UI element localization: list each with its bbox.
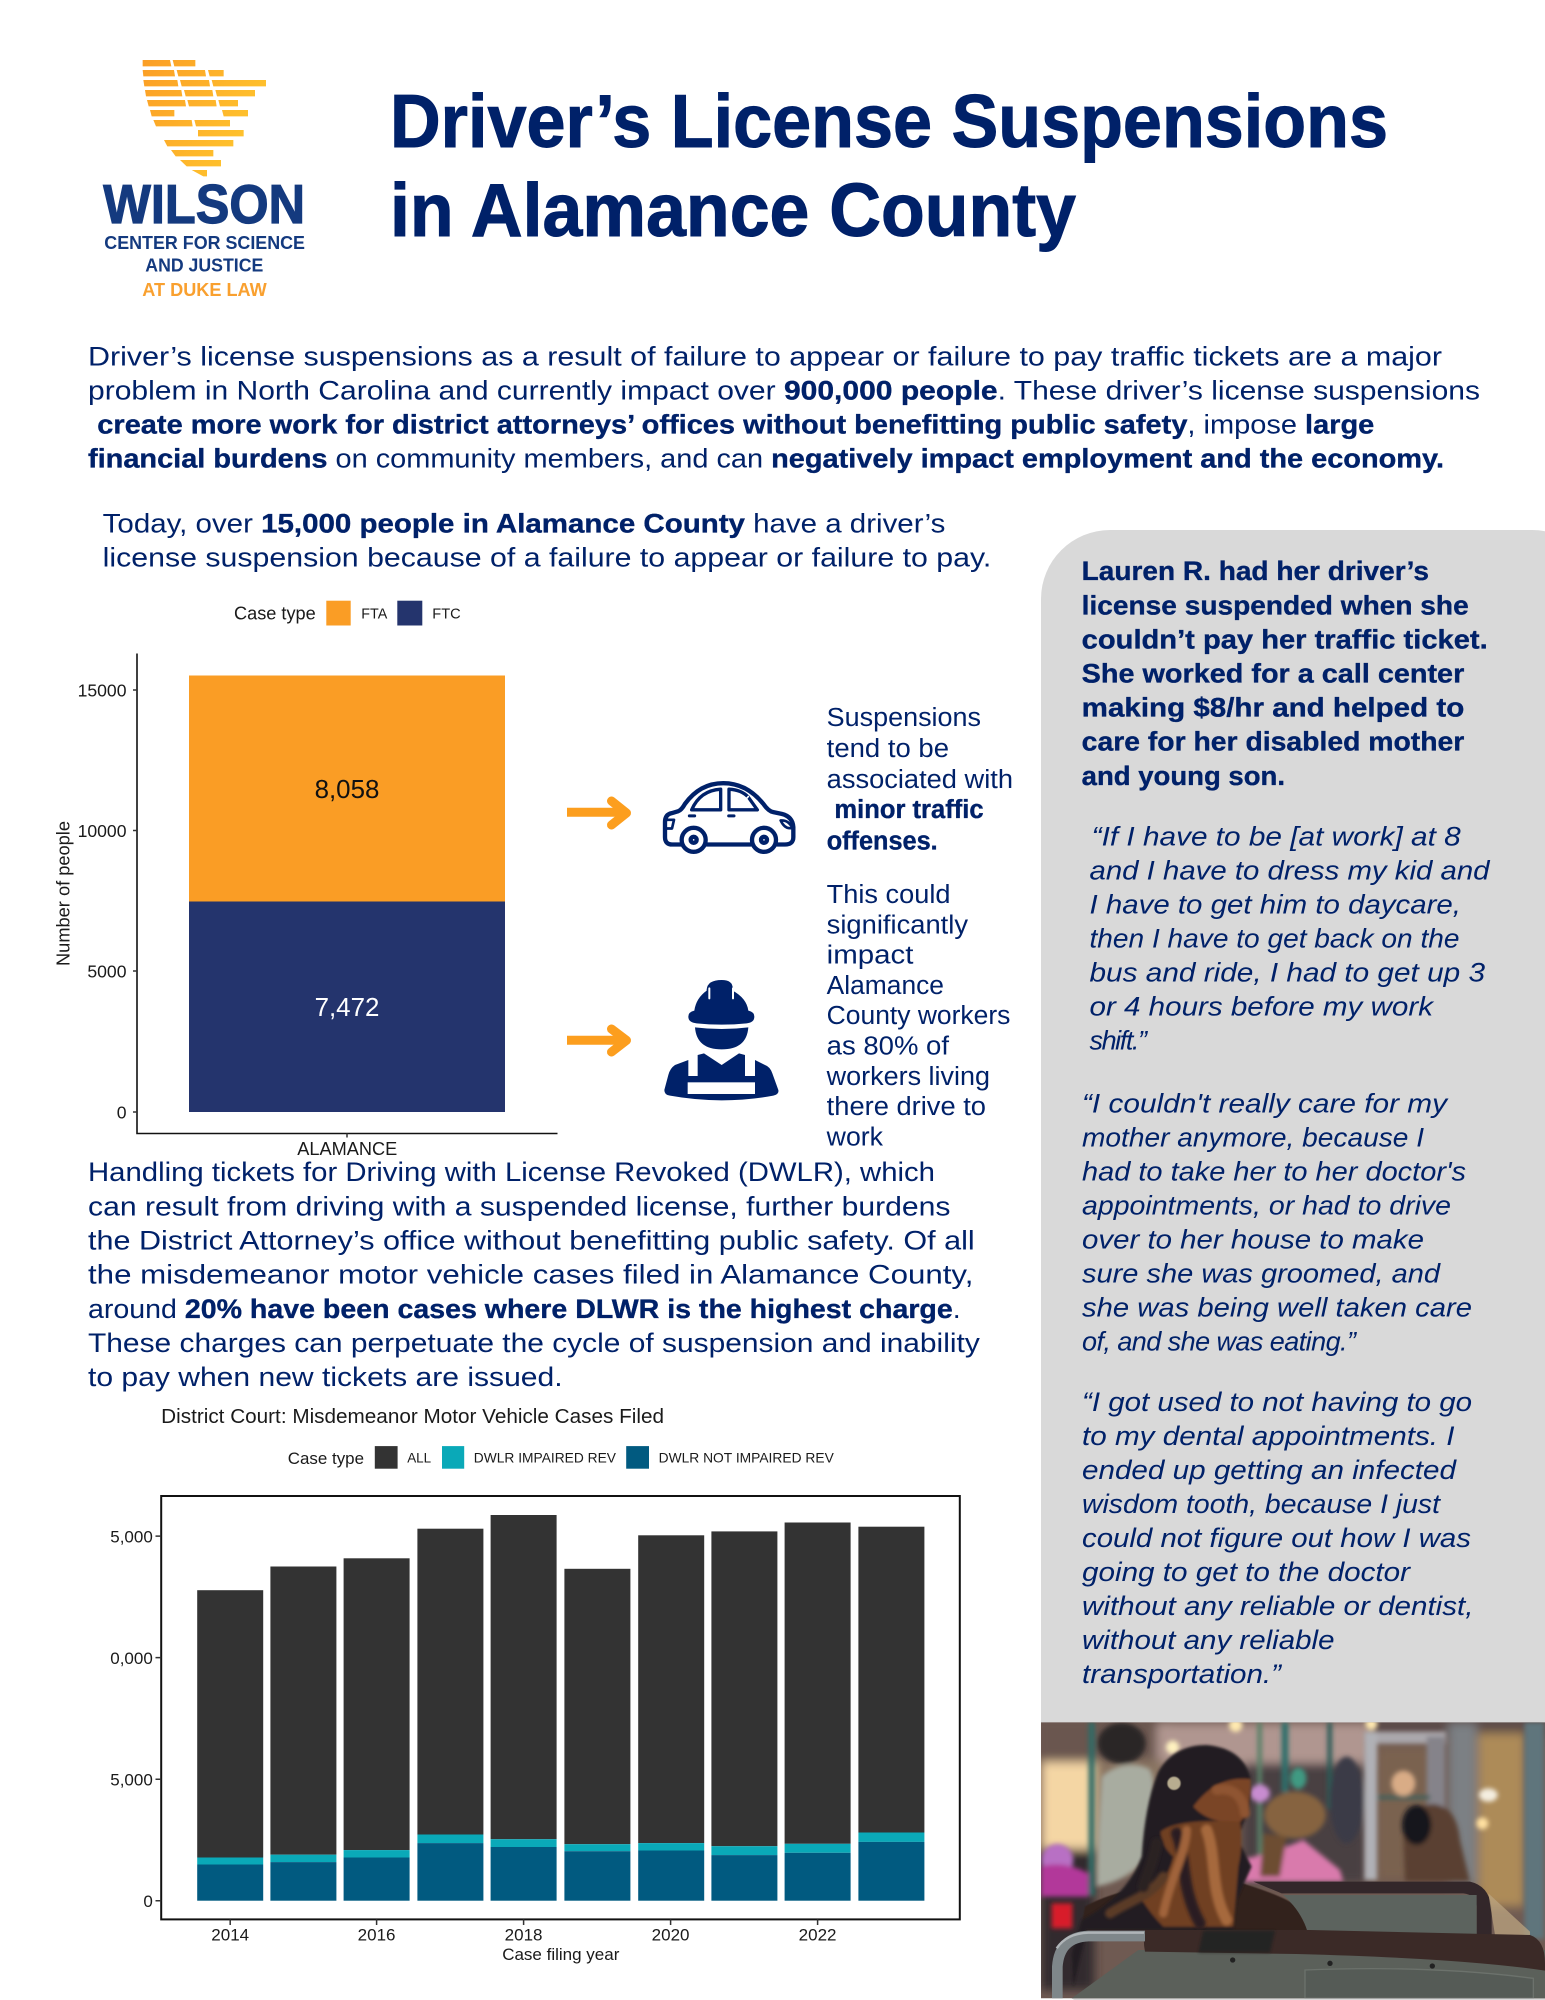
y axis (53, 654, 558, 1138)
text: minor traffic offenses: minor traffic (834, 796, 984, 824)
plot frame and axes: 2020 (652, 1926, 690, 1944)
quote: dental appointments: to my dental appointments. I (1082, 1421, 1455, 1451)
text: minor traffic offenses: Suspensions (827, 704, 981, 732)
bar: FTC segment: 7,472 (315, 994, 379, 1022)
y axis: 10000 (78, 821, 127, 841)
text: worker impact: work (826, 1123, 883, 1151)
arrow to worker (567, 1029, 626, 1052)
chart legend: FTC (432, 606, 461, 622)
panel heading: license suspended when she (1082, 590, 1469, 620)
DWLR paragraph: the misdemeanor motor vehicle cases filed in Alamance County, (88, 1259, 973, 1289)
quote: dental appointments: without any reliable (1082, 1625, 1334, 1655)
bars: ALL cases (197, 1515, 924, 1858)
quote: caring for mother: mother anymore, because I (1082, 1122, 1425, 1152)
quote: caring for mother: of, and she was eating.” (1082, 1326, 1357, 1356)
logo wordmark: AT DUKE LAW (142, 279, 267, 300)
plot frame and axes: 0,000 (110, 1649, 153, 1668)
text: minor traffic offenses: associated with (827, 766, 1013, 794)
panel background (1041, 530, 1545, 2000)
hair clip (1167, 1777, 1181, 1790)
quote: getting to work: “If I have to be [at work] at 8 (1092, 822, 1461, 852)
chart legend: DWLR IMPAIRED REV (474, 1450, 617, 1466)
plot frame and axes (110, 1496, 960, 1964)
panel heading: Lauren R. had her driver’s (1082, 556, 1429, 586)
icon: car (665, 783, 793, 852)
icon: construction worker (664, 980, 778, 1100)
logo: Wilson Center for Science and Justice at Duke Law (103, 60, 305, 300)
text: worker impact: workers living (826, 1063, 990, 1091)
plot frame and axes: 2014 (211, 1926, 249, 1944)
hair strands (1110, 1789, 1245, 1923)
window pole (1524, 1722, 1544, 1939)
rear seat (1253, 1882, 1492, 1935)
woman's hair (1072, 1745, 1252, 1987)
plot frame and axes: 5,000 (110, 1770, 153, 1789)
quote: dental appointments: transportation.” (1082, 1659, 1282, 1689)
quote: getting to work: then I have to get back on the (1090, 924, 1460, 954)
intro paragraph: financial burdens on community members, and can negatively impact employment and the economy. (88, 444, 1444, 474)
bars: DWLR impaired revocation (197, 1832, 924, 1864)
logo wordmark (103, 174, 305, 300)
title (390, 79, 1388, 252)
y axis: 5000 (87, 962, 127, 982)
quote: dental appointments: could not figure out how I was (1082, 1523, 1471, 1553)
panel heading: care for her disabled mother (1082, 727, 1465, 757)
quote: caring for mother: “I couldn't really care for my (1082, 1088, 1449, 1118)
plot frame and axes: 0 (143, 1892, 153, 1911)
chart legend (288, 1446, 834, 1469)
blurred bus interior (1037, 1717, 1545, 1990)
chart legend: FTA (361, 606, 387, 622)
intro paragraph: Driver’s license suspensions as a result of failure to appear or failure to pay traffic tickets are a major (88, 342, 1442, 372)
quote: getting to work: and I have to dress my kid and (1090, 856, 1491, 886)
chart legend: DWLR NOT IMPAIRED REV (659, 1450, 834, 1466)
plot frame and axes: 2018 (505, 1926, 543, 1944)
child in pink (1041, 1844, 1073, 1876)
girl with braid (1264, 1792, 1326, 1838)
intro paragraph: create more work for district attorneys’ offices without benefitting public safety , impose large (97, 410, 1374, 440)
DWLR paragraph: Handling tickets for Driving with License Revoked (DWLR), which (88, 1157, 935, 1187)
plot frame and axes: Case filing year (502, 1945, 620, 1964)
DWLR paragraph (88, 1157, 980, 1392)
panel heading: She worked for a call center (1082, 659, 1465, 689)
text: worker impact: impact (827, 942, 914, 970)
logo wordmark: WILSON (103, 174, 305, 235)
chart legend (234, 601, 461, 626)
bar: FTA segment: 8,058 (315, 776, 379, 804)
text: minor traffic offenses (827, 704, 1013, 855)
bars: DWLR not impaired revocation (197, 1842, 924, 1901)
intro paragraph: problem in North Carolina and currently impact over 900,000 people . These driver’s license suspensions (88, 376, 1480, 406)
text: worker impact: This could (827, 881, 950, 909)
panel: Lauren R. story (1041, 530, 1545, 2000)
DWLR paragraph: to pay when new tickets are issued. (88, 1362, 563, 1392)
quote: getting to work (1090, 822, 1491, 1056)
DWLR paragraph: can result from driving with a suspended license, further burdens (88, 1191, 950, 1221)
chart legend: Case type (234, 604, 316, 624)
quote: getting to work: I have to get him to daycare, (1090, 890, 1461, 920)
logo wordmark: AND JUSTICE (145, 254, 263, 275)
plot frame and axes: 5,000 (110, 1527, 153, 1546)
chart legend: Case type (288, 1449, 364, 1468)
text: minor traffic offenses: tend to be (827, 735, 949, 763)
y axis: 0 (117, 1102, 127, 1122)
quote: caring for mother (1082, 1088, 1472, 1356)
DWLR paragraph: around 20% have been cases where DLWR is the highest charge . (88, 1294, 961, 1324)
intro paragraph (88, 342, 1480, 474)
text: worker impact: as 80% of (827, 1032, 950, 1060)
text: worker impact: Alamance (827, 972, 944, 1000)
front seat (1072, 1950, 1545, 1998)
long-haired passenger (1403, 1804, 1470, 1882)
quote: caring for mother: she was being well taken care (1082, 1292, 1472, 1322)
stacked bar chart: suspensions by case type (53, 601, 558, 1159)
arrow to car (567, 801, 626, 825)
quote: dental appointments: without any reliable or dentist, (1082, 1591, 1474, 1621)
plot frame and axes: 2016 (358, 1926, 396, 1944)
Alamance suspension statement: Today, over 15,000 people in Alamance County have a driver’s (103, 508, 945, 538)
text: worker impact: County workers (827, 1002, 1010, 1030)
DWLR paragraph: the District Attorney’s office without benefitting public safety. Of all (88, 1225, 975, 1255)
DWLR paragraph: These charges can perpetuate the cycle of suspension and inability (88, 1328, 980, 1358)
quote: getting to work: shift.” (1090, 1026, 1148, 1056)
quote: getting to work: bus and ride, I had to get up 3 (1090, 958, 1485, 988)
bar: FTA segment (189, 676, 505, 902)
text: worker impact: significantly (827, 911, 968, 939)
panel heading (1082, 556, 1488, 791)
quote: caring for mother: over to her house to make (1082, 1224, 1424, 1254)
bar chart: misdemeanor motor vehicle cases by year (110, 1406, 960, 1964)
y axis: Number of people (53, 821, 73, 966)
quote: caring for mother: appointments, or had to drive (1082, 1190, 1451, 1220)
quote: dental appointments (1082, 1387, 1474, 1689)
photo: woman riding a bus, viewed from behind (1037, 1717, 1545, 1998)
panel heading: making $8/hr and helped to (1082, 693, 1464, 723)
standing passenger (1098, 1723, 1146, 1764)
panel heading: couldn’t pay her traffic ticket. (1082, 625, 1488, 655)
quote: getting to work: or 4 hours before my work (1090, 992, 1435, 1022)
logo wordmark: CENTER FOR SCIENCE (104, 232, 305, 253)
quote: dental appointments: wisdom tooth, because I just (1082, 1489, 1442, 1519)
panel heading: and young son. (1082, 761, 1285, 791)
bar: FTC segment (189, 902, 505, 1112)
quote: dental appointments: ended up getting an infected (1082, 1455, 1457, 1485)
title: in Alamance County (390, 168, 1076, 252)
quote: caring for mother: sure she was groomed, and (1082, 1258, 1441, 1288)
logo mark: striped orange shield (143, 60, 266, 176)
Alamance suspension statement: license suspension because of a failure to appear or failure to pay. (103, 542, 991, 572)
title: Driver’s License Suspensions (390, 79, 1388, 163)
plot frame and axes: 2022 (799, 1926, 837, 1944)
quote: dental appointments: “I got used to not having to go (1082, 1387, 1472, 1417)
Alamance suspension statement (103, 508, 991, 572)
x axis label: ALAMANCE (297, 1139, 397, 1159)
quote: dental appointments: going to get to the doctor (1082, 1557, 1411, 1587)
text: worker impact: there drive to (827, 1093, 986, 1121)
chart title: District Court: Misdemeanor Motor Vehicle Cases Filed (161, 1406, 664, 1428)
quote: caring for mother: had to take her to her doctor's (1082, 1156, 1466, 1186)
woman's jacket (1083, 1884, 1307, 1931)
text: worker impact (826, 881, 1010, 1151)
text: minor traffic offenses: offenses. (827, 827, 938, 855)
chart legend: ALL (407, 1450, 431, 1466)
y axis: 15000 (78, 680, 127, 700)
